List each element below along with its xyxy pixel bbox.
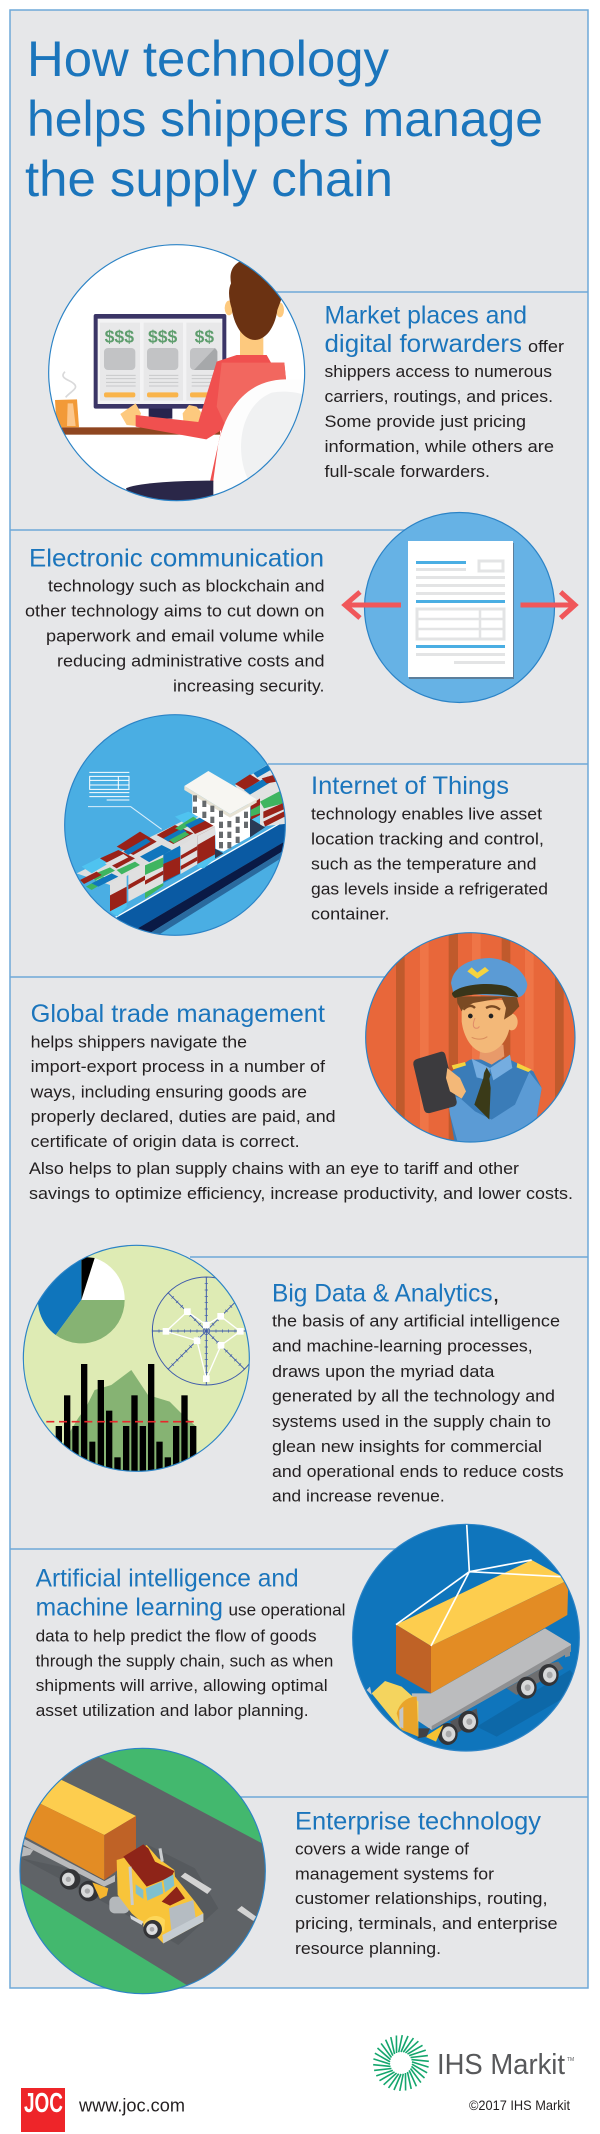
heading and description: global trade management: properly declared, duties are paid, and (31, 1107, 336, 1126)
heading and description: enterprise technology (295, 1807, 558, 1958)
heading and description: internet of things (311, 772, 548, 923)
logo: JOC (21, 2087, 65, 2132)
heading and description: big data: the basis of any artificial intelligence (272, 1312, 560, 1331)
heading and description: artificial intelligence: machine learning (36, 1594, 223, 1622)
heading and description: global trade management: Global trade management (31, 1000, 325, 1028)
heading and description: market places: digital forwarders (324, 330, 522, 358)
rear containers (235, 765, 290, 827)
heading and description: global trade management: import-export process in a number of (31, 1057, 325, 1076)
heading and description: artificial intelligence: Artificial intelligence and (36, 1565, 299, 1593)
icon: green sunburst (373, 2035, 429, 2091)
heading and description: artificial intelligence: shipments will arrive, allowing optimal (36, 1676, 328, 1695)
heading and description: global trade management: certificate of origin data is correct. (31, 1132, 300, 1151)
panel: big data and analytics (23, 1245, 564, 1506)
copyright: ©2017 IHS Markit (469, 2097, 570, 2113)
heading and description: big data: and operational ends to reduce costs (272, 1462, 564, 1481)
logo: JOC: JOC (24, 2087, 63, 2118)
heading and description: global trade management: helps shippers navigate the (31, 1032, 247, 1051)
heading and description: enterprise technology: Enterprise technology (295, 1807, 542, 1835)
heading and description: internet of things: gas levels inside a refrigerated (311, 879, 548, 898)
icon: person at computer comparing prices: $$$ (105, 327, 134, 347)
icon: charts (23, 1245, 260, 1476)
bar chart (56, 1364, 196, 1476)
heading and description: internet of things: such as the temperature and (311, 854, 536, 873)
heading and description: enterprise technology: resource planning. (295, 1939, 441, 1958)
heading and description: internet of things: technology enables live asset (311, 804, 542, 823)
heading and description: artificial intelligence: use operational (228, 1600, 346, 1620)
heading and description: electronic communication: Electronic communication (29, 545, 324, 573)
arrow: left (345, 592, 401, 618)
heading and description: global trade management: ways, including ensuring goods are (30, 1082, 307, 1101)
website address: www.joc.com (78, 2096, 185, 2116)
heading and description: internet of things: Internet of Things (311, 772, 509, 800)
heading and description: artificial intelligence (36, 1565, 345, 1720)
panel: global trade management (29, 928, 575, 1203)
heading and description: electronic communication: technology such as blockchain and (48, 577, 324, 596)
heading and description: electronic communication: reducing administrative costs and (57, 652, 324, 671)
heading and description: market places: Market places and (324, 302, 527, 330)
deck containers top (77, 813, 217, 885)
panel: internet of things (65, 715, 548, 935)
panel: market places and digital forwarders (49, 245, 564, 503)
heading and description: big data: systems used in the supply chain to (272, 1412, 551, 1431)
heading and description: artificial intelligence: through the supply chain, such as when (36, 1651, 333, 1670)
icon: container ship (65, 715, 290, 935)
heading and description: big data: and increase revenue. (272, 1486, 445, 1506)
icon: truck trailer with container and network lines (353, 1523, 583, 1751)
heading and description: big data: and machine-learning processes, (272, 1336, 533, 1356)
heading and description: big data: draws upon the myriad data (272, 1362, 495, 1381)
heading and description: electronic communication: other technology aims to cut down on (25, 602, 324, 621)
heading and description: electronic communication: paperwork and email volume while (46, 627, 324, 646)
heading and description: market places: Some provide just pricing (324, 412, 526, 431)
panel: electronic communication (25, 512, 575, 702)
title: How technology (27, 31, 389, 87)
heading and description: big data: generated by all the technology and (272, 1387, 555, 1406)
heading and description: market places: shippers access to numerous (324, 362, 552, 381)
heading and description: market places: full-scale forwarders. (324, 462, 490, 481)
deck containers front (110, 874, 127, 912)
panel: enterprise technology (15, 1745, 558, 2008)
heading and description: big data: glean new insights for commercial (272, 1437, 542, 1456)
icon: person at computer comparing prices: $$$ (148, 327, 178, 347)
heading and description: market places: carriers, routings, and prices. (324, 387, 553, 406)
title (25, 31, 543, 207)
panel: artificial intelligence and machine learning (36, 1523, 583, 1751)
icon: document with arrows (345, 512, 575, 702)
heading and description: market places (324, 302, 564, 481)
logo: IHS Markit (373, 2035, 574, 2091)
pie chart (38, 1257, 125, 1343)
icon: person at computer comparing prices: $$ (195, 327, 214, 347)
heading and description: global trade management: savings to optimize efficiency, increase productivity, and lower costs. (29, 1184, 573, 1203)
radar chart (152, 1277, 260, 1385)
bridge (215, 848, 223, 858)
heading and description: electronic communication (25, 545, 324, 696)
heading and description: market places: offer (528, 337, 564, 356)
heading and description: enterprise technology: pricing, terminals, and enterprise (295, 1914, 558, 1933)
heading and description: enterprise technology: management systems for (295, 1864, 494, 1883)
heading and description: global trade management: Also helps to plan supply chains with an eye to tariff and other (29, 1159, 519, 1178)
logo: IHS Markit: IHS Markit (437, 2049, 565, 2081)
heading and description: big data: Big Data & Analytics, (272, 1280, 499, 1308)
title: helps shippers manage (27, 91, 543, 147)
heading and description: artificial intelligence: data to help predict the flow of goods (36, 1626, 317, 1645)
heading and description: enterprise technology: covers a wide range of (295, 1839, 469, 1858)
heading and description: internet of things: location tracking and control, (311, 829, 544, 848)
heading and description: electronic communication: increasing security. (173, 677, 324, 696)
heading and description: big data (272, 1280, 564, 1506)
heading and description: market places: information, while others are (324, 437, 554, 456)
callout (88, 772, 162, 829)
icon: customs officer with tablet (366, 928, 575, 1148)
icon: person at computer comparing prices (49, 245, 312, 503)
heading and description: enterprise technology: customer relationships, routing, (295, 1889, 548, 1908)
arrow: right (520, 592, 575, 618)
title: the supply chain (25, 151, 393, 207)
heading and description: global trade management (29, 1000, 573, 1203)
heading and description: artificial intelligence: asset utilization and labor planning. (36, 1701, 309, 1720)
icon: truck on road (19, 1748, 266, 1994)
heading and description: internet of things: container. (311, 904, 390, 923)
logo: IHS Markit: TM (567, 2057, 574, 2063)
